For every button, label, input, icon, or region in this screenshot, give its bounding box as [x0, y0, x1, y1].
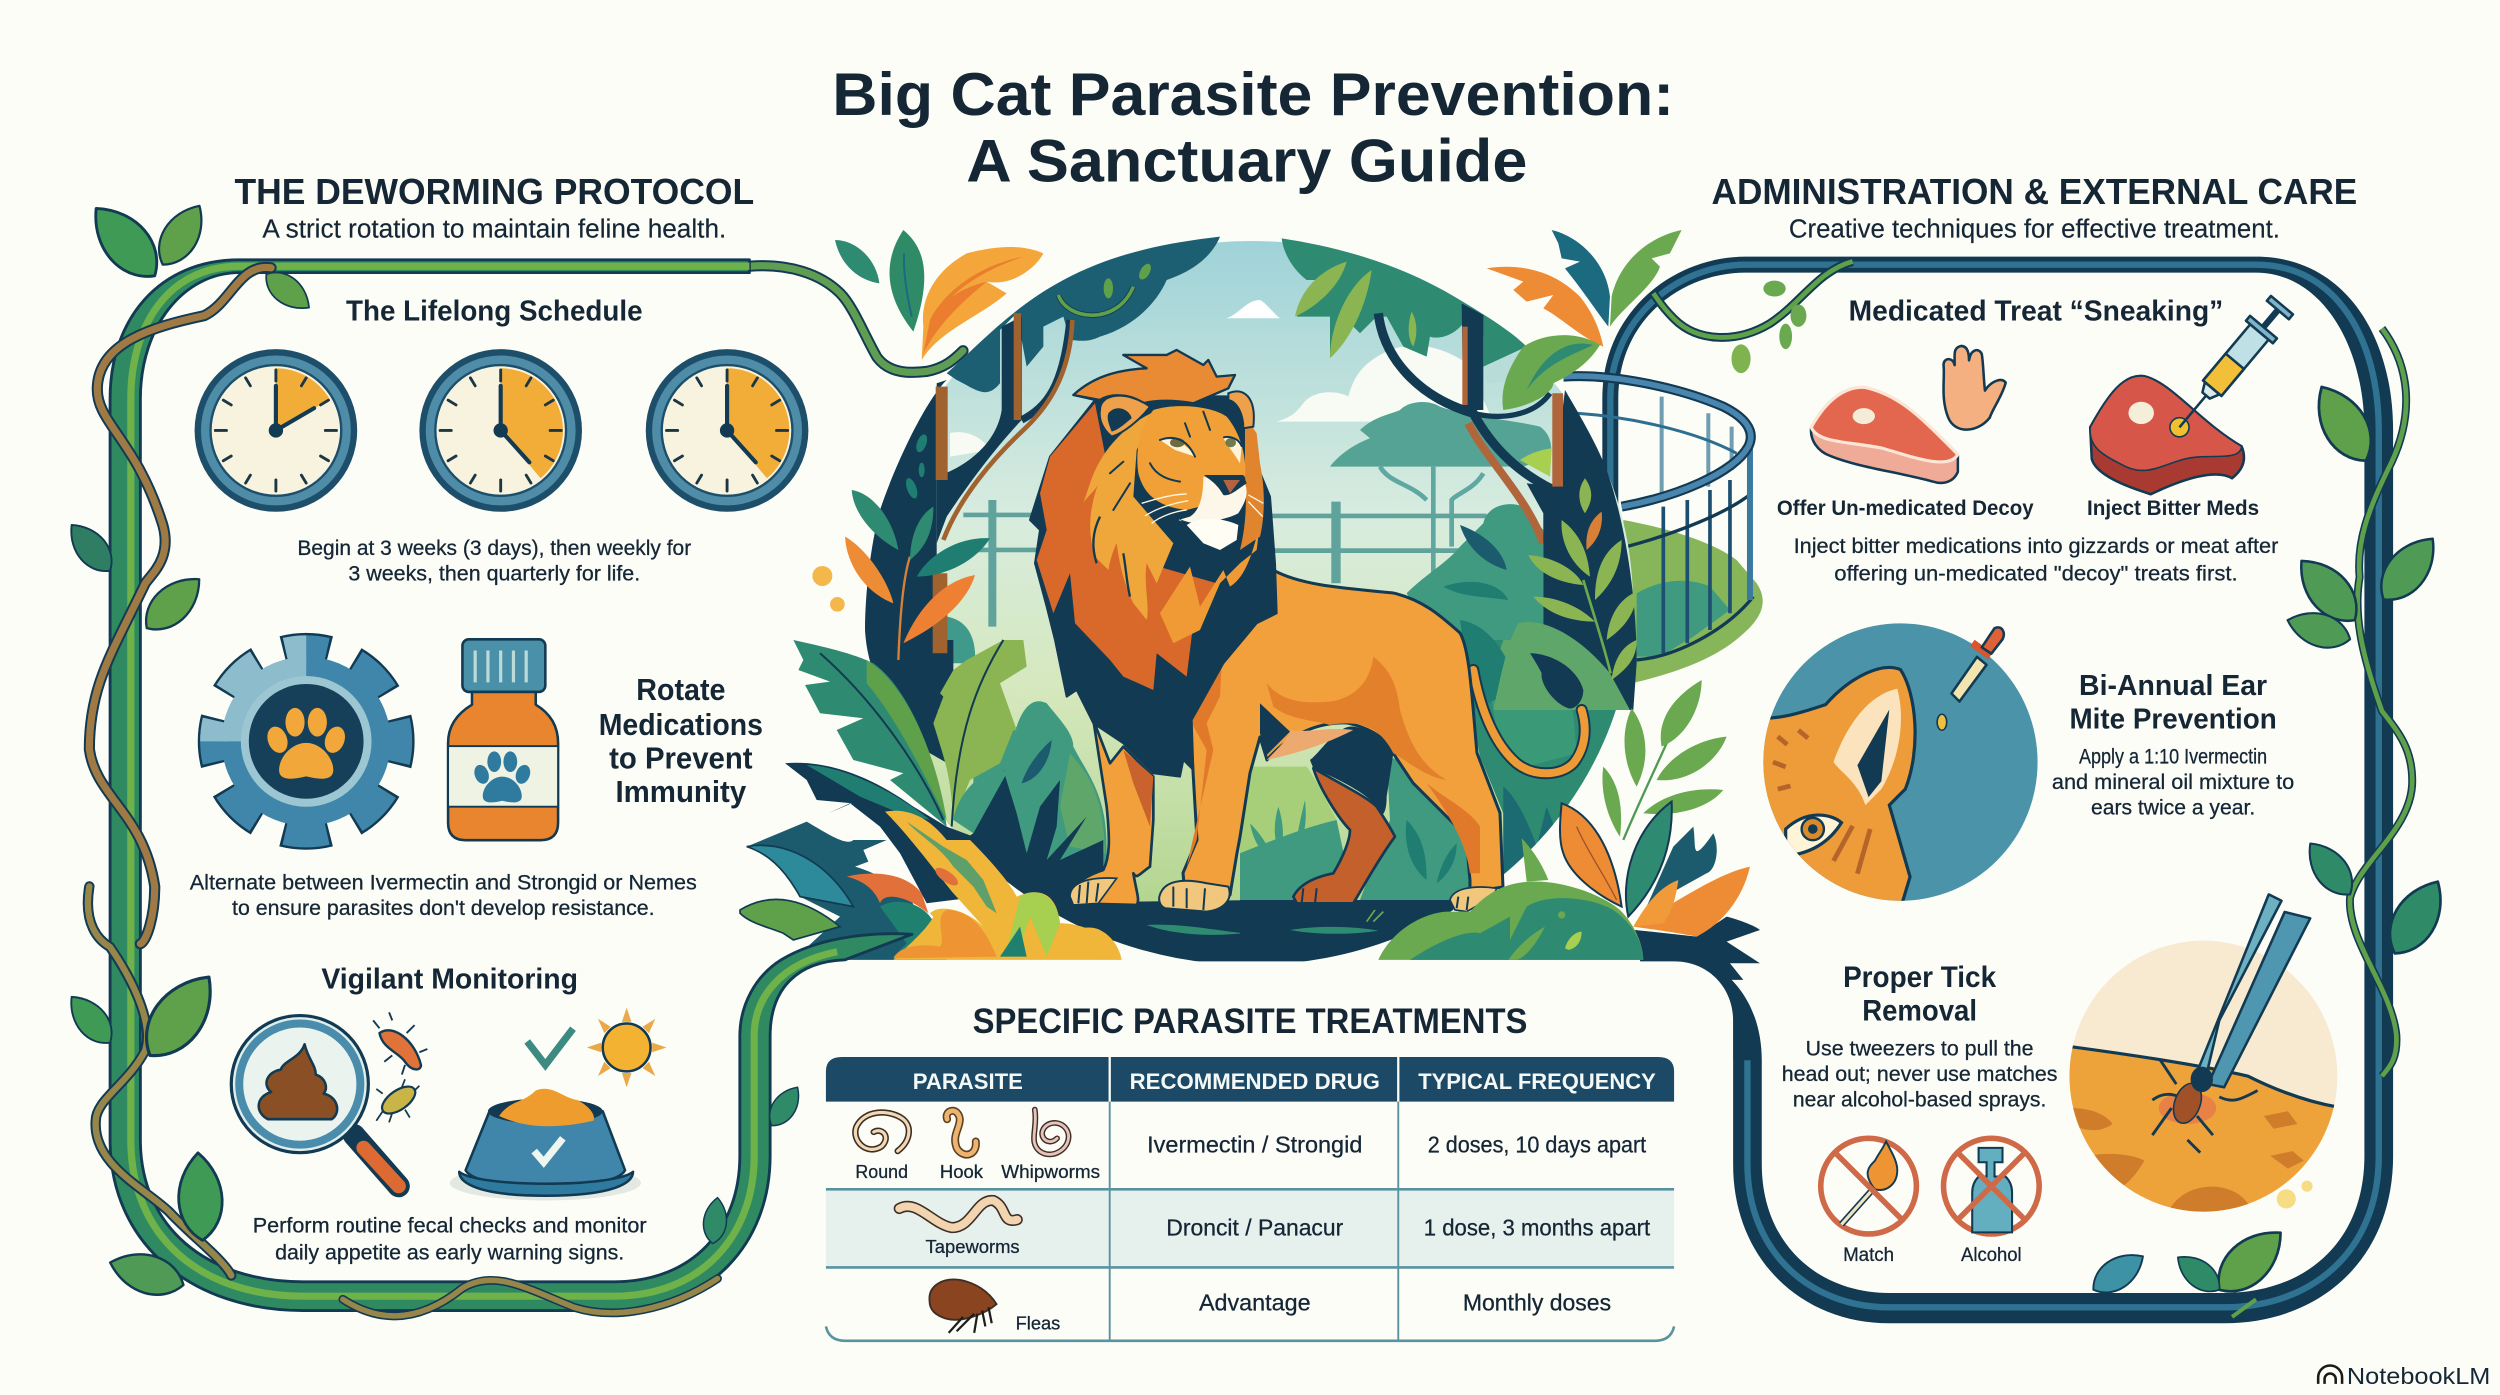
- icon: clock three: [646, 349, 808, 512]
- mane top tuft: [1073, 350, 1235, 403]
- icon: check mark: [529, 1032, 571, 1065]
- text: tick removal heading and description: near alcohol-based sprays.: [1793, 1087, 2046, 1111]
- heading: rotate medications: to Prevent: [609, 742, 753, 775]
- golden face mane: [1083, 410, 1173, 620]
- text: ear mite heading and description: Apply a 1:10 Ivermectin: [2079, 745, 2267, 769]
- mane right side: [1240, 417, 1264, 550]
- text: tick removal heading and description: Proper Tick: [1843, 961, 1997, 994]
- text: rotation description: to ensure parasites don't develop resistance.: [232, 896, 655, 920]
- table cells: drugs and frequency: Droncit / Panacur: [1166, 1215, 1344, 1241]
- section heading: the deworming protocol: A strict rotation to maintain feline health.: [262, 214, 726, 244]
- icon: roundworm: [855, 1112, 909, 1151]
- table header: PARASITE: [913, 1069, 1023, 1094]
- frame: right panel: [1602, 257, 2393, 1323]
- icon: orange parasite: [373, 1012, 427, 1075]
- text: rotation description: [190, 871, 697, 920]
- icon: tapeworm: [899, 1200, 1017, 1228]
- icon: clock one: [195, 349, 357, 512]
- icon: food bowl: [450, 1089, 641, 1200]
- table cells: drugs and frequency: Ivermectin / Strongid: [1147, 1132, 1362, 1158]
- foreground mound and leaves lower right: [1378, 802, 1760, 980]
- icon: sun: [587, 1008, 666, 1087]
- text: ear mite heading and description: Mite Prevention: [2069, 704, 2277, 736]
- text: treat description: Inject bitter medications into gizzards or meat after: [1794, 534, 2278, 558]
- foreground plants lower left: [740, 811, 1122, 960]
- text: schedule description: [297, 536, 691, 585]
- panel background: treatments: [772, 961, 1733, 1395]
- lion ears: [1100, 391, 1254, 437]
- icon: stop hand: [1944, 346, 2006, 430]
- logo: NotebookLM: NotebookLM: [2347, 1363, 2490, 1389]
- title: Big Cat Parasite Prevention:: [832, 60, 1674, 128]
- table cells: drugs and frequency: Monthly doses: [1463, 1290, 1611, 1316]
- labels: worm types: [855, 1161, 1100, 1182]
- heading: lifelong schedule: The Lifelong Schedule: [346, 295, 643, 327]
- table: parasite treatments: [826, 1057, 1674, 1341]
- labels: match and alcohol: Alcohol: [1961, 1245, 2022, 1266]
- panel: specific parasite treatments: [826, 1002, 1674, 1341]
- section heading: administration and external care: Creative techniques for effective treatment.: [1789, 214, 2280, 244]
- icon: medicine bottle: [448, 639, 558, 840]
- labels: worm types: Whipworms: [1001, 1161, 1100, 1182]
- table row backgrounds: [826, 1057, 1674, 1341]
- text: ear mite heading and description: [2052, 670, 2294, 820]
- text: tick removal heading and description: head out; never use matches: [1782, 1062, 2058, 1086]
- icon: gear with paw: [214, 649, 399, 834]
- label: tapeworms: Tapeworms: [926, 1236, 1020, 1257]
- labels: match and alcohol: [1843, 1245, 2022, 1266]
- text: ear mite heading and description: Bi-Annual Ear: [2079, 670, 2267, 702]
- icon: syringe: [2166, 294, 2295, 439]
- frame: left vine panel: [110, 260, 912, 1311]
- vines and leaves on right frame: [1653, 261, 2456, 1317]
- subsection: medicated treat sneaking: [1777, 294, 2295, 585]
- table cells: drugs and frequency: Advantage: [1199, 1290, 1311, 1316]
- labels: worm types: Hook: [940, 1161, 984, 1182]
- icon: no alcohol spray: [1944, 1138, 2039, 1234]
- table cells: drugs and frequency: 1 dose, 3 months apart: [1424, 1215, 1651, 1241]
- text: tick removal heading and description: Use tweezers to pull the: [1806, 1036, 2034, 1060]
- foliage above the circle, right: [1487, 230, 1682, 347]
- title: [832, 60, 1674, 195]
- illustration: tick on skin with tweezers: [2065, 894, 2344, 1220]
- text: schedule description: 3 weeks, then quarterly for life.: [348, 561, 640, 585]
- text: treat description: offering un-medicated "decoy" treats first.: [1834, 561, 2238, 585]
- table header: [913, 1069, 1656, 1094]
- heading: rotate medications: Medications: [599, 709, 763, 742]
- lion tail: [1473, 653, 1585, 773]
- text: monitoring description: [253, 1213, 647, 1264]
- big leaves lower left of lion: [785, 640, 1027, 903]
- icon: whipworm: [1034, 1110, 1069, 1154]
- side plants, outside circle right: [1602, 680, 1727, 840]
- leaves on left vine: [60, 194, 807, 1303]
- section heading: the deworming protocol: [234, 172, 754, 244]
- reddish mane: [1037, 403, 1217, 690]
- table cells: drugs and frequency: [1147, 1132, 1651, 1316]
- icon: no match: [1821, 1138, 1916, 1234]
- central scene: lion in sanctuary: [740, 230, 1763, 980]
- heading: rotate medications: [599, 674, 763, 809]
- icon: hookworm: [947, 1111, 976, 1155]
- side plants and bushes, right of lion: [1443, 478, 1637, 710]
- text: rotation description: Alternate between Ivermectin and Strongid or Nemes: [190, 871, 697, 895]
- canopy and trees, left: [865, 237, 1220, 710]
- icon: clock two: [419, 349, 582, 512]
- table header: TYPICAL FREQUENCY: [1418, 1069, 1656, 1094]
- ground: [1056, 900, 1240, 962]
- orange mane right of chin: [1160, 523, 1260, 643]
- section heading: the deworming protocol: THE DEWORMING PROTOCOL: [234, 172, 754, 212]
- labels: worm types: Round: [855, 1161, 908, 1182]
- illustration: lion ear with dropper: [1754, 623, 2038, 909]
- canopy and trees, right: [1282, 238, 1637, 710]
- icon: yellow parasite: [376, 1079, 420, 1122]
- plant on left of circle: [845, 490, 990, 660]
- label: fleas: Fleas: [1016, 1313, 1060, 1334]
- text: ear mite heading and description: ears twice a year.: [2091, 796, 2255, 820]
- heading: vigilant monitoring: Vigilant Monitoring: [321, 963, 578, 995]
- sky and far background inside circle: [910, 241, 1633, 962]
- icon: magnifier over fecal sample: [231, 1016, 399, 1186]
- table header: RECOMMENDED DRUG: [1130, 1069, 1380, 1094]
- lion face: [1137, 406, 1245, 510]
- text: tick removal heading and description: Removal: [1862, 994, 1977, 1027]
- text: monitoring description: Perform routine fecal checks and monitor: [253, 1213, 647, 1237]
- icon: un-medicated steak: [1811, 387, 1958, 483]
- vine: left panel top run into scene: [478, 266, 963, 372]
- subsection: ear mite prevention: [1754, 623, 2294, 909]
- title: A Sanctuary Guide: [966, 127, 1527, 195]
- lion body: [1183, 570, 1503, 895]
- lion mane and head: [1030, 350, 1277, 777]
- lion far legs: [1070, 720, 1395, 905]
- lion body shading and paws: [1159, 657, 1497, 912]
- brown wrapping vines: left panel: [88, 267, 718, 1316]
- heading: rotate medications: Rotate: [636, 674, 725, 707]
- face details: [1093, 412, 1263, 597]
- subsection: the lifelong schedule: [195, 295, 808, 585]
- icon: injected steak: [2090, 376, 2244, 494]
- subsection: rotate medications: [190, 639, 763, 920]
- heading: medicated treat: Medicated Treat “Sneaking”: [1849, 295, 2223, 327]
- lower dark mane: [1030, 395, 1277, 777]
- table cells: drugs and frequency: 2 doses, 10 days apart: [1428, 1132, 1647, 1158]
- section heading: administration and external care: ADMINISTRATION & EXTERNAL CARE: [1712, 172, 2357, 212]
- text: tick removal heading and description: [1782, 961, 2058, 1111]
- subsection: vigilant monitoring: [231, 963, 666, 1264]
- text: ear mite heading and description: and mineral oil mixture to: [2052, 770, 2294, 794]
- labels: decoy and inject: Inject Bitter Meds: [2087, 496, 2259, 520]
- section heading: administration and external care: [1712, 172, 2357, 244]
- heading: specific parasite treatments: SPECIFIC PARASITE TREATMENTS: [973, 1002, 1527, 1041]
- text: treat description: [1794, 534, 2278, 585]
- labels: match and alcohol: Match: [1843, 1245, 1894, 1266]
- labels: decoy and inject: [1777, 496, 2259, 520]
- labels: decoy and inject: Offer Un-medicated Decoy: [1777, 496, 2034, 520]
- foliage above the circle, left: [812, 230, 1043, 612]
- icon: dropper: [1937, 627, 2004, 730]
- lawn and cage: [1563, 376, 1763, 683]
- text: monitoring description: daily appetite as early warning signs.: [275, 1240, 624, 1264]
- subsection: proper tick removal: [1782, 894, 2344, 1266]
- icon: flea: [929, 1280, 997, 1333]
- text: schedule description: Begin at 3 weeks (3 days), then weekly for: [297, 536, 691, 560]
- heading: rotate medications: Immunity: [615, 776, 746, 809]
